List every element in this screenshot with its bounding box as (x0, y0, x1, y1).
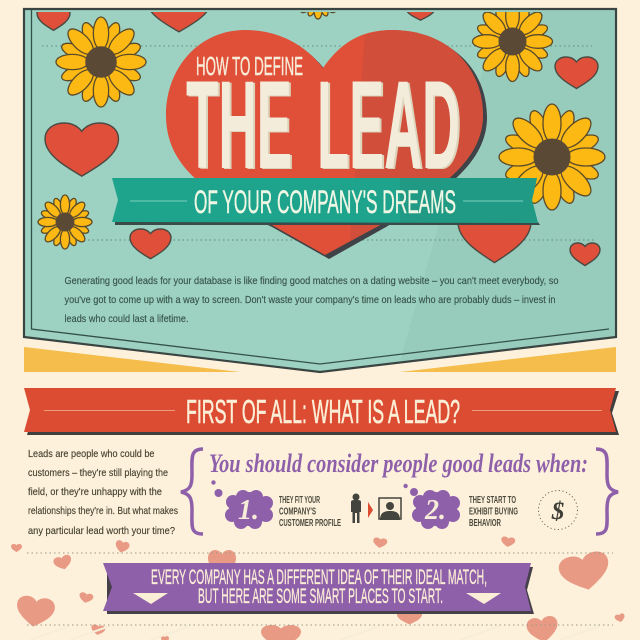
step 1 text: THEY FIT YOUR (279, 494, 320, 506)
number 2: 2. (424, 495, 446, 526)
step 1 text: CUSTOMER PROFILE (279, 517, 341, 529)
the lead: THE (186, 56, 292, 195)
dotted separators (27, 553, 613, 625)
title (186, 51, 462, 196)
teal ribbon (112, 178, 540, 225)
lead definition text: field, or they're unhappy with the (28, 486, 162, 498)
intro text (64, 275, 559, 325)
icon: profile photo (379, 498, 401, 520)
sunflowers (38, 0, 605, 249)
ribbon text (151, 566, 487, 608)
faint stripes (30, 626, 600, 640)
intro text: Generating good leads for your database is like finding good matches on a dating website – you can't meet everybody, so (64, 275, 559, 287)
thought bubble 2 (403, 484, 460, 529)
step 2 text: THEY START TO (469, 494, 516, 506)
icon: dollar: $ (551, 498, 564, 525)
triangles (133, 593, 501, 604)
lead definition text (28, 448, 178, 537)
step 2 text: BEHAVIOR (469, 517, 501, 529)
step 1 text: COMPANY'S (279, 506, 316, 518)
lead definition text: Leads are people who could be (28, 448, 155, 460)
pink hearts (11, 536, 626, 640)
thought bubble 1 (211, 480, 273, 529)
step 2 text (469, 494, 518, 529)
panel: teal header (24, 0, 616, 372)
icon: person (351, 494, 361, 523)
lead definition text: customers – they're still playing the (28, 467, 168, 479)
small hearts on panel (37, 0, 600, 266)
arrow (368, 502, 373, 518)
red banner (24, 388, 619, 435)
right brace (596, 449, 618, 534)
step 1 text (279, 494, 341, 529)
purple ribbon (103, 563, 534, 614)
left brace (181, 449, 203, 534)
intro text: you've got to come up with a way to screen. Don't waste your company's time on leads who are probably duds – invest in (64, 294, 556, 306)
lead definition text: relationships they're in. But what makes (28, 505, 178, 517)
intro text: leads who could last a lifetime. (64, 313, 188, 325)
step 1 (211, 480, 341, 529)
icon: dollar (538, 490, 578, 530)
step 2 text: EXHIBIT BUYING (469, 506, 518, 518)
the lead: THE (188, 57, 294, 196)
step 2 (403, 484, 518, 529)
lead definition text: any particular lead worth your time? (28, 525, 175, 537)
number 1: 1. (238, 495, 259, 526)
big heart (166, 30, 487, 259)
how to define: HOW TO DEFINE (196, 51, 303, 81)
yellow corner wedges (24, 347, 616, 372)
